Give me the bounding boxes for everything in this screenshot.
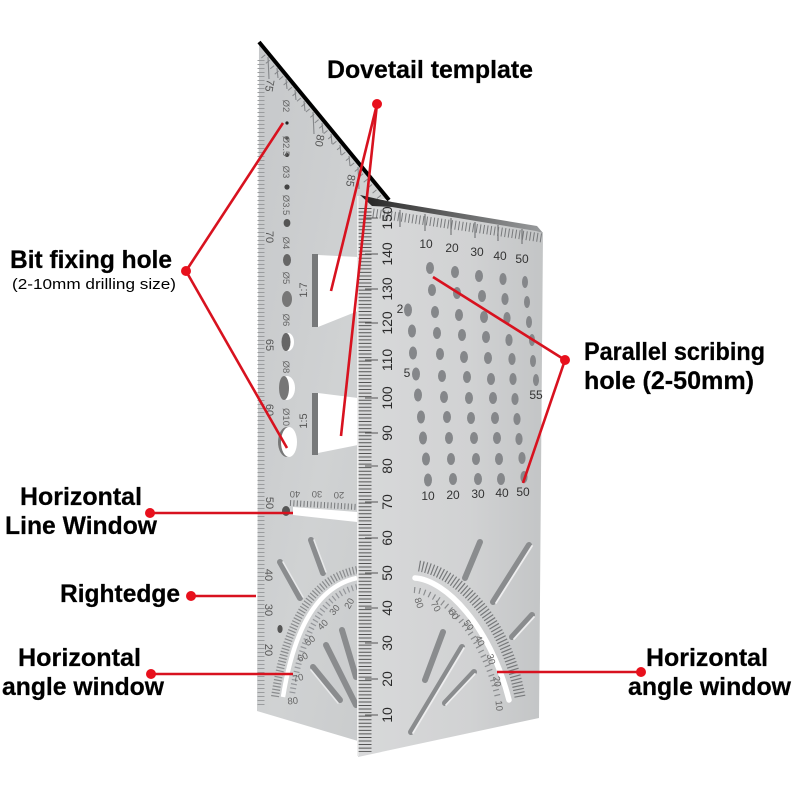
left panel scale numbers: 60 [263, 404, 275, 416]
bit size labels: Ø4 [280, 237, 291, 249]
right angle protractor: 20 [490, 675, 503, 688]
pointer dot [186, 591, 196, 601]
right angle protractor: 60 [446, 607, 461, 622]
dovetail window 1:5: 1:5 [298, 413, 310, 429]
dovetail window 1:5 [298, 393, 358, 455]
scribing hole labels: 50 [516, 485, 530, 499]
bit size labels: Ø8 [280, 361, 291, 373]
dovetail window 1:7: 1:7 [298, 282, 310, 298]
left angle protractor: 70 [292, 672, 305, 685]
left angle protractor: 80 [287, 696, 299, 707]
callout: parallel scribing hole [433, 277, 765, 483]
left angle protractor: 50 [303, 633, 318, 649]
pointer dot [560, 355, 570, 365]
heading: horizontal: Horizontal [20, 483, 142, 511]
pointer line [497, 671, 641, 673]
pointer dot [372, 99, 382, 109]
bit size labels: Ø3 [280, 166, 291, 178]
scribing hole labels: 40 [495, 486, 509, 500]
callout: horizontal angle window right [497, 644, 792, 701]
spine numbers: 10 [379, 707, 395, 723]
pointer lines to dovetail windows [331, 104, 377, 436]
right angle protractor: 50 [461, 618, 476, 633]
scribing hole labels: 50 [515, 252, 529, 266]
left panel of the ruler [257, 42, 389, 741]
callout: dovetail template [327, 56, 533, 436]
left panel scale numbers: 20 [262, 644, 274, 656]
left angle protractor: 40 [316, 618, 331, 633]
right angle protractor: 30 [484, 653, 497, 666]
heading: rightedge: Rightedge [60, 580, 180, 608]
callout: rightedge [60, 580, 256, 608]
left panel scale numbers: 85 [343, 173, 357, 188]
callout: bit fixing hole [10, 123, 287, 448]
scribing hole labels: 20 [445, 241, 459, 255]
subheading: drilling size: (2-10mm drilling size) [12, 276, 176, 293]
heading: angle window: angle window [2, 673, 165, 701]
heading: dovetail template: Dovetail template [327, 56, 533, 84]
pointer line [150, 512, 293, 514]
pointer dot [146, 669, 156, 679]
scribing hole labels: 2 [397, 302, 404, 316]
spine numbers: 20 [379, 671, 395, 687]
scribing hole labels: 55 [529, 388, 543, 402]
bit size labels: Ø5 [280, 272, 291, 284]
right angle protractor: 10 [493, 700, 504, 712]
spine numbers: 110 [379, 349, 395, 371]
bit size labels: Ø6 [280, 314, 291, 326]
heading: bit fixing hole: Bit fixing hole [10, 246, 172, 274]
heading: horizontal: Horizontal [18, 644, 141, 672]
scribing hole labels: 40 [493, 249, 507, 263]
scribing hole labels: 30 [470, 245, 484, 259]
product: woodworking square ruler [257, 42, 543, 757]
spine numbers: 70 [379, 494, 395, 510]
heading: line window: Line Window [5, 512, 158, 540]
left angle protractor [275, 570, 357, 707]
bit size labels: Ø2.5 [280, 136, 291, 156]
black diagonal edge [259, 42, 389, 200]
pointer line [191, 595, 256, 597]
left panel scale numbers: 30 [262, 604, 274, 616]
scribing hole labels: 10 [421, 489, 435, 503]
left angle protractor: 30 [327, 603, 343, 618]
right angle slots [411, 542, 534, 733]
top edge scale [373, 210, 542, 244]
left panel scale numbers: 70 [263, 231, 275, 243]
heading second line: hole (2-50mm) [584, 367, 754, 395]
dovetail window 1:7 [298, 254, 358, 327]
scribing hole labels [397, 237, 543, 503]
horizontal line window: 20 [334, 489, 344, 500]
bit size labels: Ø3.5 [280, 195, 291, 215]
right angle protractor [411, 566, 520, 712]
left panel scale numbers: 40 [262, 569, 274, 581]
spine numbers: 100 [379, 386, 395, 410]
spine scale [357, 196, 378, 756]
heading: parallel scribing hole: Parallel scribing [584, 338, 765, 366]
bit size labels: Ø10 [280, 408, 291, 426]
horizontal line window [282, 488, 357, 522]
pointer lines to bit holes [186, 123, 287, 448]
heading: horizontal: Horizontal [646, 644, 768, 672]
spine numbers: 130 [379, 277, 395, 301]
left panel scale numbers: 75 [262, 78, 276, 93]
spine numbers: 120 [379, 311, 395, 335]
horizontal line window: 30 [312, 488, 322, 499]
pointer line [151, 673, 293, 675]
left panel scale numbers: 80 [312, 133, 326, 148]
left panel edge scale [258, 60, 264, 708]
left angle slots [280, 540, 356, 705]
scribing hole labels: 20 [446, 488, 460, 502]
spine numbers: 30 [379, 635, 395, 651]
spine numbers: 150 [379, 206, 395, 230]
pointer dot [636, 667, 646, 677]
spine numbers: 140 [379, 242, 395, 266]
left panel scale numbers [262, 78, 357, 656]
spine numbers: 80 [379, 458, 395, 474]
spine numbers: 40 [379, 600, 395, 616]
pointer dot [145, 508, 155, 518]
diagonal edge scale [263, 56, 384, 203]
bit size labels [280, 100, 291, 426]
callout: horizontal angle window left [2, 644, 293, 701]
left panel scale numbers: 50 [263, 497, 275, 509]
right panel of the ruler [357, 195, 543, 757]
pointer dot [181, 266, 191, 276]
right angle protractor: 40 [472, 634, 486, 648]
left panel scale numbers: 65 [263, 339, 275, 351]
top edge shadow [360, 195, 543, 233]
bit size labels: Ø2 [280, 100, 291, 112]
spine numbers [379, 206, 395, 723]
spine numbers: 90 [379, 425, 395, 441]
parallel scribing holes grid [404, 262, 539, 486]
bit fixing holes column [278, 121, 297, 457]
right angle protractor: 70 [428, 599, 443, 614]
left angle protractor: 60 [296, 651, 310, 665]
scribing hole labels: 10 [419, 237, 433, 251]
pointer lines to grid [433, 277, 565, 483]
spine numbers: 60 [379, 530, 395, 546]
left angle protractor: 20 [342, 596, 357, 611]
heading: angle window: angle window [628, 673, 792, 701]
scribing hole labels: 5 [404, 366, 411, 380]
callout: horizontal line window [5, 483, 293, 540]
scribing hole labels: 30 [471, 487, 485, 501]
spine numbers: 50 [379, 565, 395, 581]
horizontal line window: 40 [290, 488, 300, 499]
right angle protractor: 80 [411, 596, 425, 610]
